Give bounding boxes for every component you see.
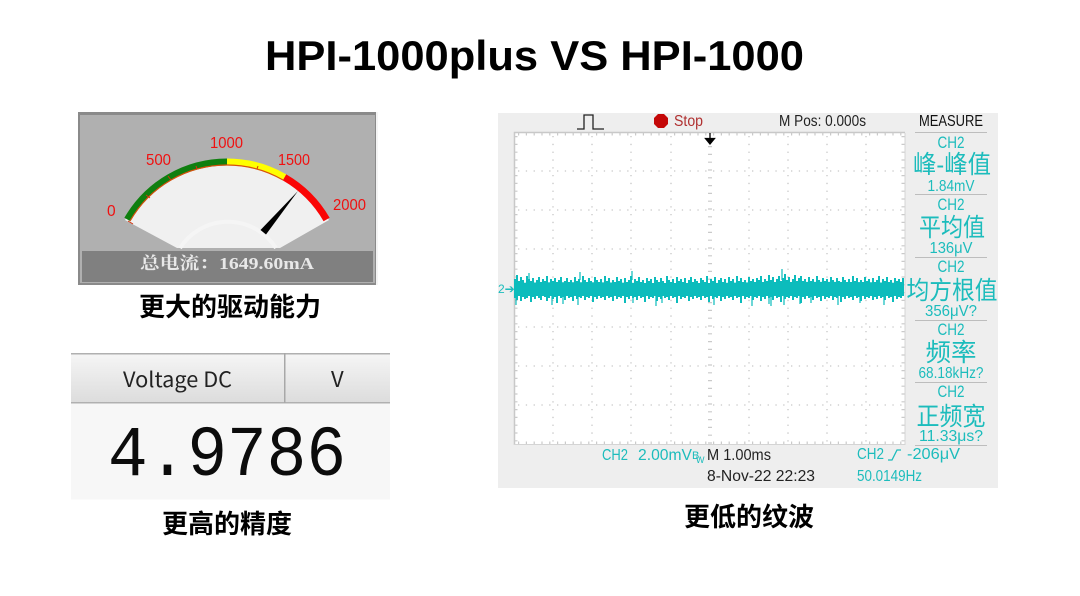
scope footer readouts: 2.00mV [638,447,692,464]
measure: peak to peak: 1.84mV [928,178,975,195]
trigger arrow [706,133,714,144]
scope footer readouts: 8-Nov-22 22:23 [707,468,815,485]
measure: frequency: 68.18kHz? [918,365,984,382]
status: stop: Stop [674,113,703,130]
scope footer readouts: -206μV [907,446,960,463]
panel: oscilloscope [498,113,998,488]
measure: peak to peak [913,134,991,195]
scope footer readouts: CH2 [857,446,884,463]
scope footer readouts: CH2 [602,447,628,464]
measure: positive width: 正频宽 [916,403,986,431]
gauge scale labels: 1000 [210,135,243,152]
measure: peak to peak: CH2 [938,134,964,152]
title: HPI-1000plus VS HPI-1000 [265,32,804,79]
measure: peak to peak: 峰-峰值 [913,151,991,179]
gauge scale labels: 0 [107,203,116,220]
status: stop [654,113,703,130]
scope footer readouts: M 1.00ms [707,447,771,464]
measure: rms: 356μV? [925,303,977,320]
gauge scale labels: 1500 [278,152,310,169]
scope footer readouts: 50.0149Hz [857,468,922,485]
meter header: Voltage DC [123,364,232,394]
gauge dial face [125,160,329,248]
measure heading: MEASURE [919,113,983,130]
gauge needle [260,191,298,234]
measure: positive width [916,383,986,445]
panel: voltage meter [71,353,390,500]
measure: frequency: CH2 [938,321,964,339]
scope footer readouts: B [692,450,699,462]
measure: mean: 平均值 [919,214,985,242]
measure: mean: CH2 [938,196,964,214]
caption: drive capability: 更大的驱动能力 [139,292,321,322]
measure: mean [919,196,985,257]
measure: positive width: 11.33μs? [919,428,983,445]
meter header: V [331,362,344,394]
measure: rms: 均方根值 [906,277,998,305]
waveform trace [514,269,904,306]
scope footer readouts [602,446,960,485]
time position: M Pos: 0.000s [779,113,866,130]
measure dividers [915,132,987,446]
scope grid [518,136,904,445]
meter value [71,404,390,500]
icon: trigger pulse [577,115,604,129]
measure: rms [906,258,998,320]
gauge colour arc [127,162,327,224]
gauge scale labels: 500 [146,152,171,169]
measure: mean: 136μV [930,240,973,257]
meter header [71,353,390,404]
measure: positive width: CH2 [938,383,964,401]
scope plot area [514,132,905,445]
measure: frequency [918,321,984,382]
gauge scale labels: 2000 [333,197,366,214]
scope footer readouts: W [696,455,705,465]
gauge readout bar: 总电流：1649.60mA [140,253,315,273]
gauge readout bar [82,251,373,282]
caption: precision: 更高的精度 [162,509,292,539]
panel: current gauge [78,112,378,285]
measure: rms: CH2 [938,258,964,276]
caption: lower ripple: 更低的纹波 [684,502,814,532]
channel 2 marker: 2➔ [498,282,515,296]
meter value: 4.9786 [108,417,346,497]
gauge scale labels [107,135,366,220]
measure: frequency: 频率 [926,339,976,367]
